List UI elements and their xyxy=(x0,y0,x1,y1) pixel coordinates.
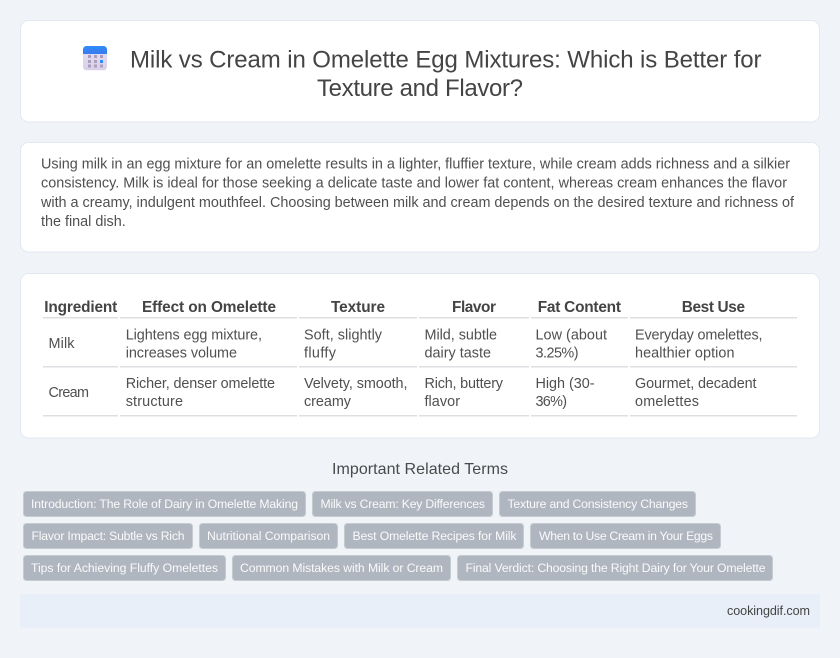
tag: Introduction: The Role of Dairy in Omelette Making xyxy=(31,497,298,511)
panel: intro xyxy=(20,142,820,252)
table row: milk: dairy taste xyxy=(424,345,491,361)
tag: Best Omelette Recipes for Milk xyxy=(352,529,517,543)
table header xyxy=(44,299,745,316)
table row: cream xyxy=(48,376,756,410)
tag: Final Verdict: Choosing the Right Dairy for Your Omelette xyxy=(466,561,766,575)
tag: Flavor Impact: Subtle vs Rich xyxy=(32,529,184,543)
footer xyxy=(20,594,820,628)
tag xyxy=(458,556,772,580)
table row: cream: omelettes xyxy=(635,394,699,410)
tag: Tips for Achieving Fluffy Omelettes xyxy=(31,561,218,575)
panel: comparison table xyxy=(20,274,820,438)
table row: cream: Richer, denser omelette xyxy=(126,376,275,392)
title: Milk vs Cream in Omelette Egg Mixtures: Which is Better for xyxy=(130,46,762,74)
tag: When to Use Cream in Your Eggs xyxy=(539,529,713,543)
table header: Effect on Omelette xyxy=(142,299,276,316)
intro text: with a creamy, indulgent mouthfeel. Choosing between milk and cream depends on the desired texture and richness of xyxy=(40,195,795,211)
title xyxy=(130,46,762,102)
tag group: related terms xyxy=(24,492,772,580)
tag: Texture and Consistency Changes xyxy=(508,497,688,511)
table row: cream: Gourmet, decadent xyxy=(635,376,756,392)
table row: milk xyxy=(48,327,762,361)
table row: cream: structure xyxy=(126,394,183,410)
table row: milk: Lightens egg mixture, xyxy=(126,327,262,343)
tag: Common Mistakes with Milk or Cream xyxy=(240,561,443,575)
table row: milk: Mild, subtle xyxy=(424,327,497,343)
table row: cream: Velvety, smooth, xyxy=(304,376,408,392)
tag: Milk vs Cream: Key Differences xyxy=(320,497,485,511)
table header: Texture xyxy=(331,299,385,316)
table row: milk: Everyday omelettes, xyxy=(635,327,762,343)
intro text: Using milk in an egg mixture for an omelette results in a lighter, fluffier texture, while cream adds richness and a silkier xyxy=(41,156,790,172)
footer: cookingdif.com xyxy=(727,604,810,618)
table header: Best Use xyxy=(682,299,745,316)
table row: milk: healthier option xyxy=(635,345,734,361)
tag xyxy=(24,524,192,548)
tag xyxy=(344,524,524,548)
table row: milk: fluffy xyxy=(304,345,337,361)
table row: milk: Low (about xyxy=(536,327,607,343)
table row: milk: Milk xyxy=(48,336,75,352)
intro text: the final dish. xyxy=(41,214,126,230)
panel: title card xyxy=(20,20,820,122)
title: Texture and Flavor? xyxy=(317,75,523,102)
tag xyxy=(530,524,720,548)
table row: cream: 36%) xyxy=(536,394,567,410)
tag xyxy=(24,556,226,580)
tag xyxy=(24,492,306,516)
table row: milk: Soft, slightly xyxy=(304,327,383,343)
table header: Fat Content xyxy=(538,299,621,316)
table row: cream: Rich, buttery xyxy=(424,376,504,392)
tag: Nutritional Comparison xyxy=(207,529,330,543)
table header: Flavor xyxy=(452,299,496,316)
table row: milk: increases volume xyxy=(126,345,237,361)
tag xyxy=(500,492,696,516)
table row: cream: Cream xyxy=(48,385,89,401)
tag xyxy=(312,492,492,516)
heading: related terms: Important Related Terms xyxy=(332,461,508,478)
tag xyxy=(200,524,338,548)
table row: cream: High (30- xyxy=(536,376,595,392)
table row: cream: creamy xyxy=(304,394,352,410)
table rules xyxy=(43,317,797,416)
icon: calendar xyxy=(83,46,107,70)
table row: milk: 3.25%) xyxy=(536,345,578,361)
intro text: consistency. Milk is ideal for those seeking a delicate taste and lower fat content, whereas cream enhances the flavor xyxy=(41,176,787,192)
table row: cream: flavor xyxy=(424,394,460,410)
table header: Ingredient xyxy=(44,299,117,316)
intro text xyxy=(40,156,795,230)
tag xyxy=(232,556,450,580)
